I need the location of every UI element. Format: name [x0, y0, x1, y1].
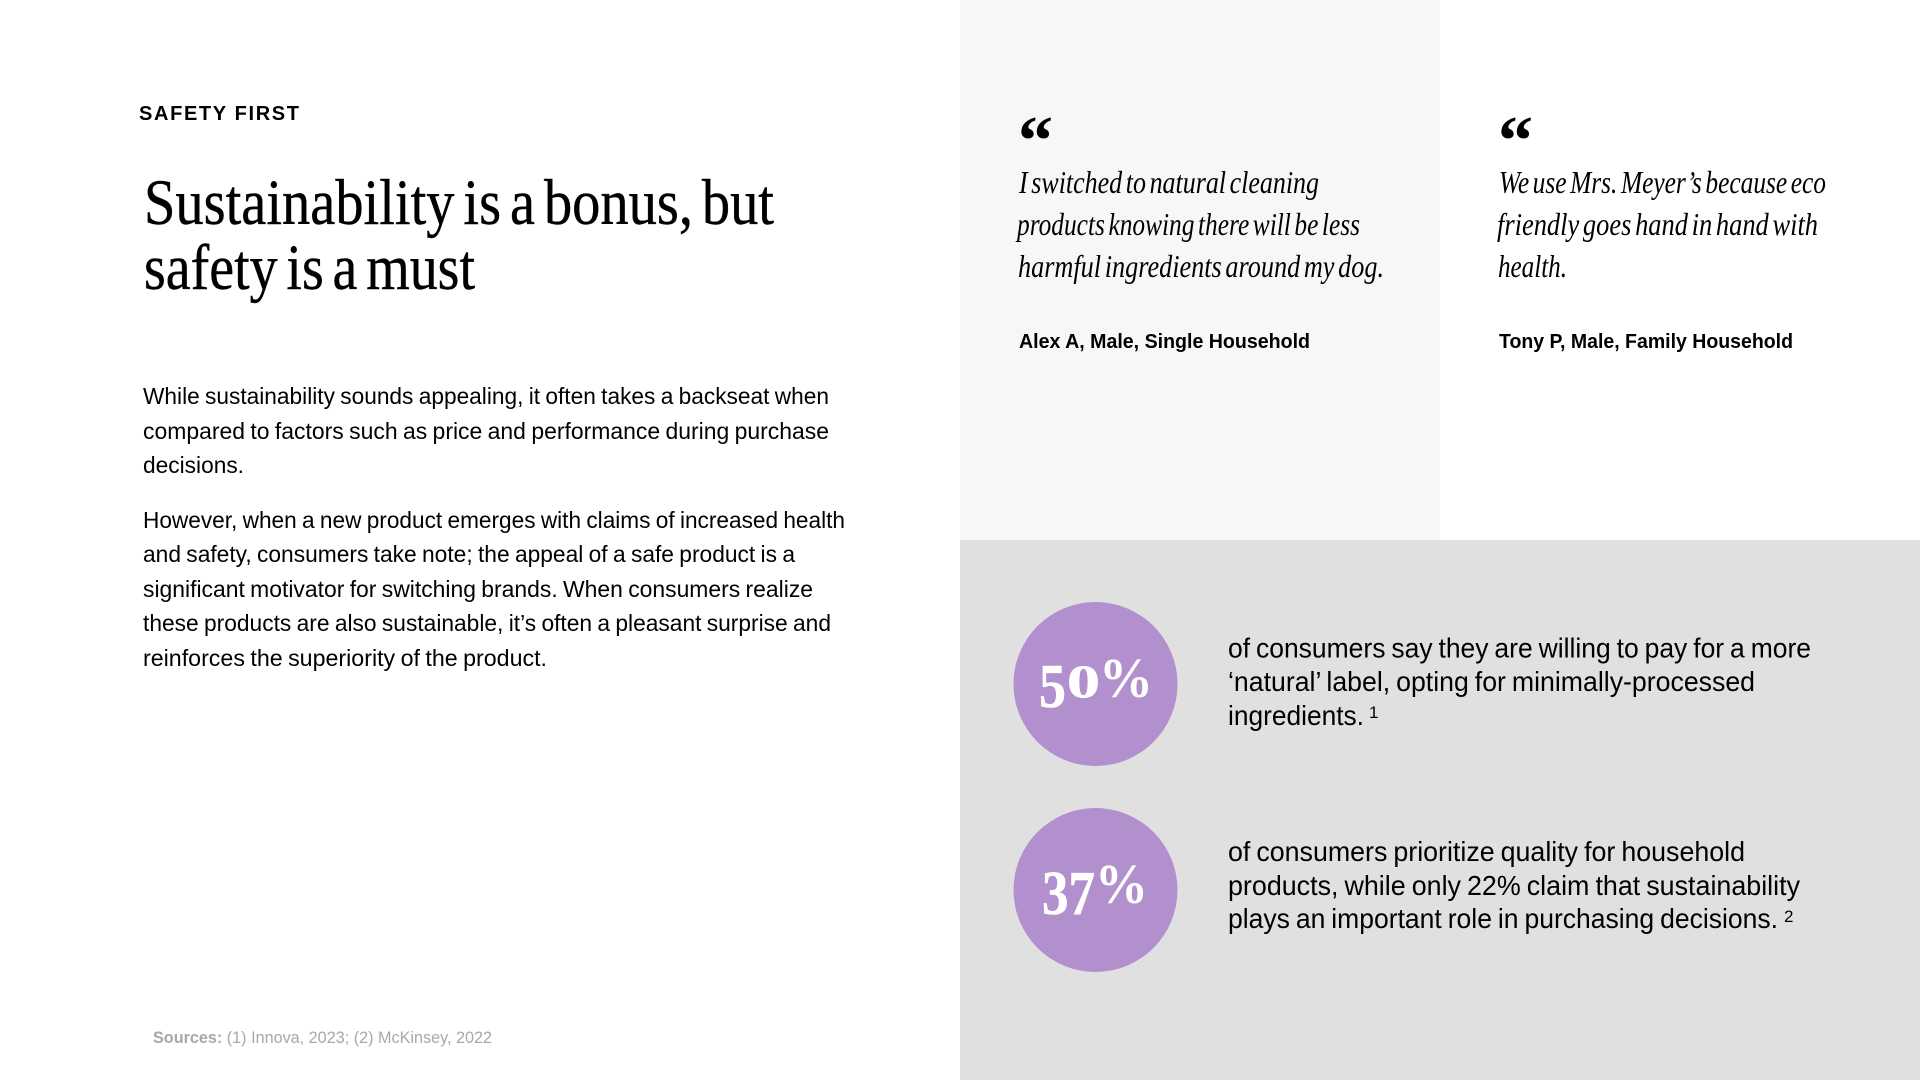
text block: intro paragraph: decisions.: [143, 452, 244, 478]
quote text one: products knowing there will be less: [1015, 206, 1360, 242]
circle: 50 percent badge: 0: [1067, 656, 1100, 708]
circle: 37 percent badge: %: [1095, 854, 1148, 916]
quote text two: friendly goes hand in hand with: [1497, 206, 1818, 242]
stat: 37 percent: [1014, 808, 1800, 972]
text block: second paragraph: [143, 507, 845, 671]
circle: 50 percent badge: [1014, 602, 1178, 766]
stat text: quality priority: products, while only 22% claim that sustainability: [1228, 870, 1800, 901]
text block: second paragraph: significant motivator for switching brands. When consumers realize: [143, 576, 813, 602]
circle: 37 percent badge: 37: [1042, 860, 1095, 928]
attribution one: Alex A, Male, Single Household: [1019, 331, 1310, 353]
text block: second paragraph: However, when a new product emerges with claims of increased health: [143, 507, 845, 533]
stat text: natural label: of consumers say they are willing to pay for a more: [1228, 632, 1811, 664]
stat text: natural label: [1228, 632, 1811, 731]
stat text: natural label: ‘natural’ label, opting for minimally-processed: [1228, 666, 1755, 697]
panel: quote two: [1497, 103, 1826, 353]
quote text one: [1015, 164, 1384, 284]
stat text: quality priority: plays an important role in purchasing decisions.: [1228, 903, 1778, 934]
text block: second paragraph: these products are also sustainable, it’s often a pleasant surprise and: [143, 610, 831, 636]
circle: 37 percent badge: [1014, 808, 1178, 972]
quote text one: harmful ingredients around my dog.: [1018, 248, 1384, 284]
quote text one: I switched to natural cleaning: [1018, 164, 1319, 200]
stat text: quality priority: 2: [1784, 907, 1793, 926]
stat text: quality priority: [1228, 836, 1800, 934]
stat text: quality priority: of consumers prioritize quality for household: [1228, 836, 1745, 867]
text block: intro paragraph: [143, 383, 829, 478]
text block: intro paragraph: While sustainability sounds appealing, it often takes a backseat when: [143, 383, 829, 409]
circle: 50 percent badge: 5: [1039, 653, 1066, 721]
text block: second paragraph: reinforces the superiority of the product.: [143, 645, 547, 671]
title: safety is a must: [144, 232, 475, 304]
panel: statistics background: [960, 540, 1920, 1080]
text block: second paragraph: and safety, consumers take note; the appeal of a safe product is a: [143, 541, 795, 567]
eyebrow heading: SAFETY FIRST: [139, 103, 299, 125]
title: Sustainability is a bonus, but: [144, 167, 774, 239]
panel: quote one: [1015, 103, 1384, 353]
icon: quote mark one: “: [1018, 103, 1053, 180]
quote text two: health.: [1498, 248, 1567, 284]
stat text: natural label: 1: [1369, 703, 1378, 722]
quote text two: [1497, 164, 1826, 284]
attribution two: Tony P, Male, Family Household: [1499, 331, 1793, 353]
text block: intro paragraph: compared to factors such as price and performance during purchase: [143, 418, 829, 444]
quote text two: We use Mrs. Meyer’s because eco: [1499, 164, 1826, 200]
stat: 50 percent: [1014, 602, 1811, 766]
stat text: natural label: ingredients.: [1228, 700, 1364, 731]
title: [144, 167, 774, 304]
icon: quote mark two: “: [1498, 103, 1533, 180]
sources footnote: Sources: (1) Innova, 2023; (2) McKinsey, 2022: [153, 1029, 492, 1047]
circle: 50 percent badge: %: [1099, 648, 1153, 710]
panel: left quote background: [960, 0, 1440, 540]
